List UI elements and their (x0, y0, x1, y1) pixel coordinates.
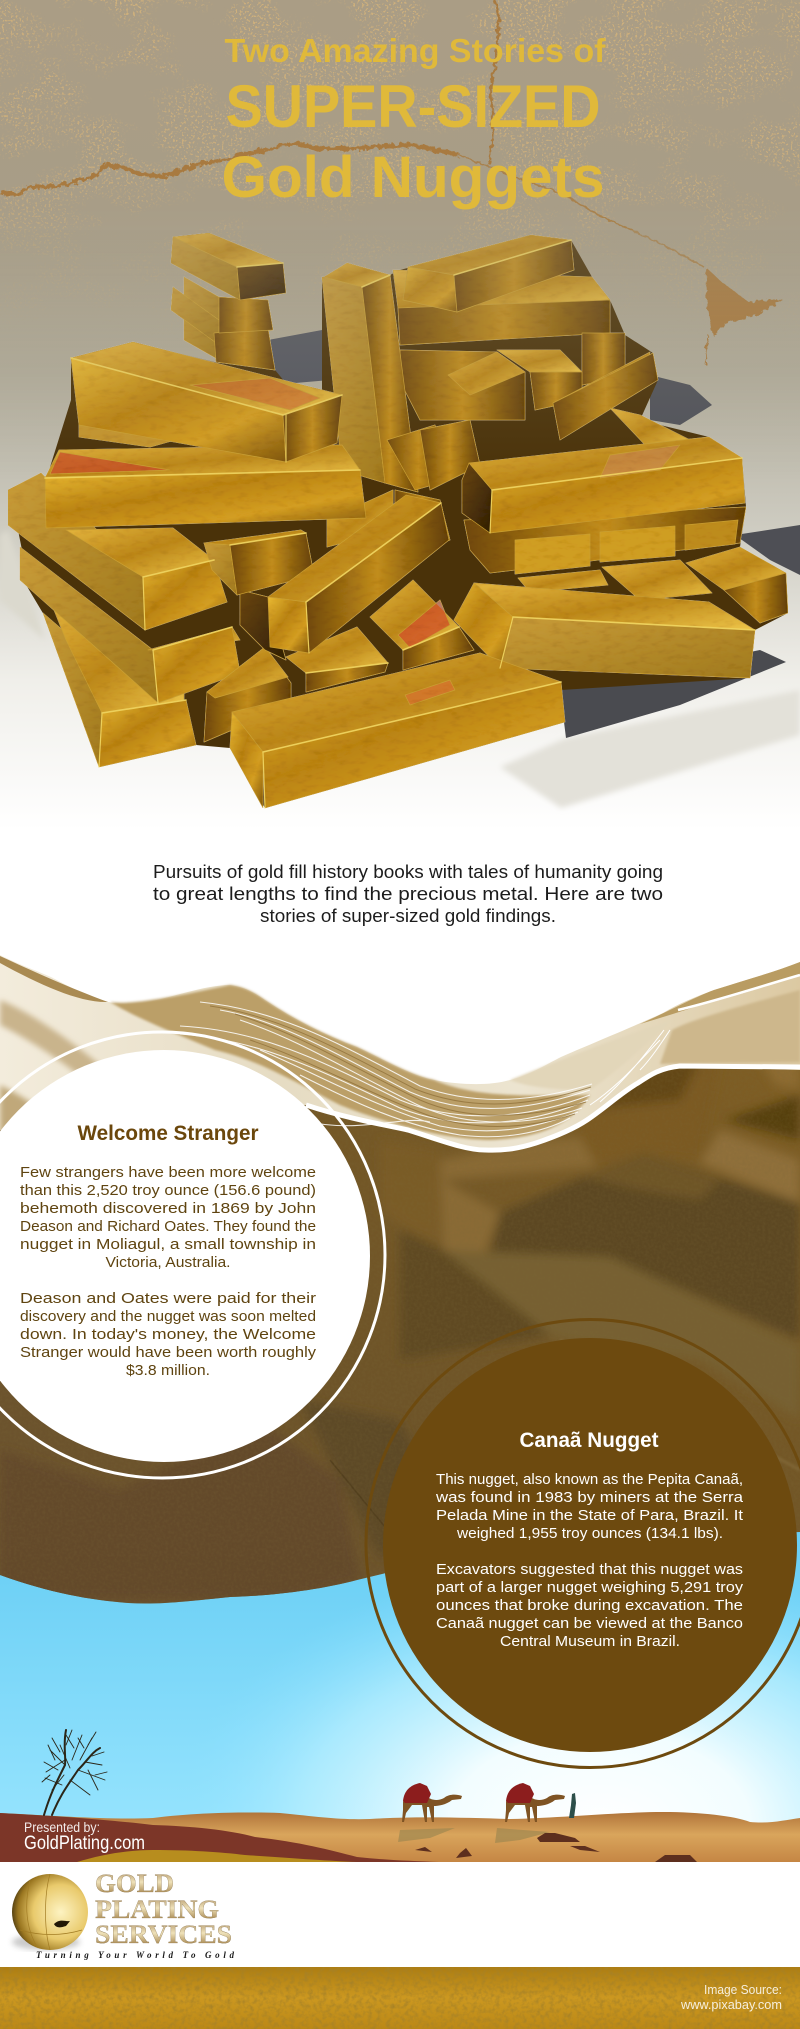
body text: $3.8 million. (126, 1362, 210, 1379)
tall upright bar (322, 263, 418, 492)
body text: Few strangers have been more welcome (20, 1164, 316, 1181)
body text: nugget in Moliagul, a small township in (20, 1236, 316, 1253)
intro text: to great lengths to find the precious metal. Here are two (153, 884, 663, 904)
dark mass beneath the pile (12, 235, 788, 808)
footer band (0, 1967, 800, 2029)
bars, right middle (462, 437, 788, 623)
bar shadows on the floor (0, 330, 800, 808)
slanted bar, lower right (454, 583, 755, 678)
body text: Deason and Oates were paid for their (20, 1290, 316, 1307)
logo wordmark: GOLD (95, 1869, 174, 1898)
circle panel (0, 1050, 370, 1462)
body text (435, 1471, 744, 1650)
image source credit (680, 1982, 782, 2012)
circle ring (366, 1320, 800, 1768)
circle ring (0, 1032, 385, 1478)
sand dunes (0, 1812, 800, 1862)
image source credit: www.pixabay.com (680, 1997, 782, 2012)
presented by (24, 1820, 145, 1854)
circle panel (383, 1338, 797, 1752)
hero background: weathered wall (0, 0, 800, 830)
logo wordmark: PLATING (95, 1895, 219, 1924)
title: Two Amazing Stories of (224, 32, 607, 69)
hero colour veil (0, 230, 800, 480)
intro text: Pursuits of gold fill history books with tales of humanity going (153, 862, 663, 882)
body text: Excavators suggested that this nugget was (436, 1561, 743, 1578)
image source credit: Image Source: (704, 1982, 782, 1997)
intro text: stories of super-sized gold findings. (260, 906, 556, 926)
title: Gold Nuggets (222, 145, 604, 210)
wave ribbon (0, 955, 800, 1150)
panel: Welcome Stranger (0, 1032, 385, 1478)
photo background: sepia gold bars (0, 1060, 800, 1620)
heading: Welcome Stranger (78, 1122, 258, 1145)
bars, upper left stack (171, 233, 286, 370)
bars, centre under the upright (327, 420, 480, 560)
body text: Canaã nugget can be viewed at the Banco (436, 1615, 743, 1632)
body text: Central Museum in Brazil. (500, 1633, 680, 1650)
desert scene: sky, dunes, camels, tree (0, 1500, 800, 1862)
logo wordmark: SERVICES (95, 1920, 232, 1949)
angled long bar, centre (268, 495, 449, 653)
presented by: GoldPlating.com (24, 1833, 145, 1854)
heading: Canaã Nugget (520, 1429, 659, 1452)
wide bar, left (45, 445, 366, 528)
sky (0, 1500, 800, 1862)
logo tagline: Turning Your World To Gold (36, 1950, 234, 1960)
tilted bar, upper left (71, 342, 342, 462)
body text: Deason and Richard Oates. They found the (20, 1218, 316, 1235)
bar edge highlights (45, 240, 755, 808)
body text: Victoria, Australia. (106, 1254, 230, 1271)
body text: behemoth discovered in 1869 by John (20, 1200, 316, 1217)
body text: was found in 1983 by miners at the Serra (435, 1489, 744, 1506)
icon: gold globe (12, 1874, 88, 1950)
body text: Pelada Mine in the State of Para, Brazil. It (436, 1507, 744, 1524)
panel: Canaã Nugget (366, 1320, 800, 1768)
title: SUPER-SIZED (226, 73, 600, 140)
body text: discovery and the nugget was soon melted (20, 1308, 316, 1325)
bars, upper right stack (393, 235, 690, 450)
body text (20, 1164, 317, 1379)
bars, lower left stack (8, 473, 240, 767)
front bar, lower centre (230, 653, 565, 808)
illustration: pile of gold bars (0, 233, 800, 808)
tan ribbon, centre (110, 985, 590, 1140)
body text: part of a larger nugget weighing 5,291 troy (436, 1579, 744, 1596)
body text: than this 2,520 troy ounce (156.6 pound) (20, 1182, 316, 1199)
body text: This nugget, also known as the Pepita Canaã, (436, 1471, 743, 1488)
red-tinted bar, centre (370, 580, 474, 670)
logo background (0, 1862, 800, 1967)
ribbon strands (180, 1002, 592, 1137)
icon: first camel (402, 1783, 462, 1822)
intro text (153, 862, 663, 926)
body text: weighed 1,955 troy ounces (134.1 lbs). (456, 1525, 723, 1542)
bars, middle small (204, 530, 388, 742)
body text: ounces that broke during excavation. The (436, 1597, 743, 1614)
body text: down. In today's money, the Welcome (20, 1326, 316, 1343)
tan ribbon, right (660, 990, 800, 1064)
icon: tree (42, 1730, 107, 1815)
icon: second camel with handler (505, 1783, 576, 1822)
title (222, 32, 607, 210)
body text: Stranger would have been worth roughly (20, 1344, 317, 1361)
logo: Gold Plating Services (0, 1862, 800, 1967)
tan ribbon, left (0, 1000, 100, 1080)
logo wordmark (95, 1869, 232, 1949)
presented by: Presented by: (24, 1820, 100, 1835)
